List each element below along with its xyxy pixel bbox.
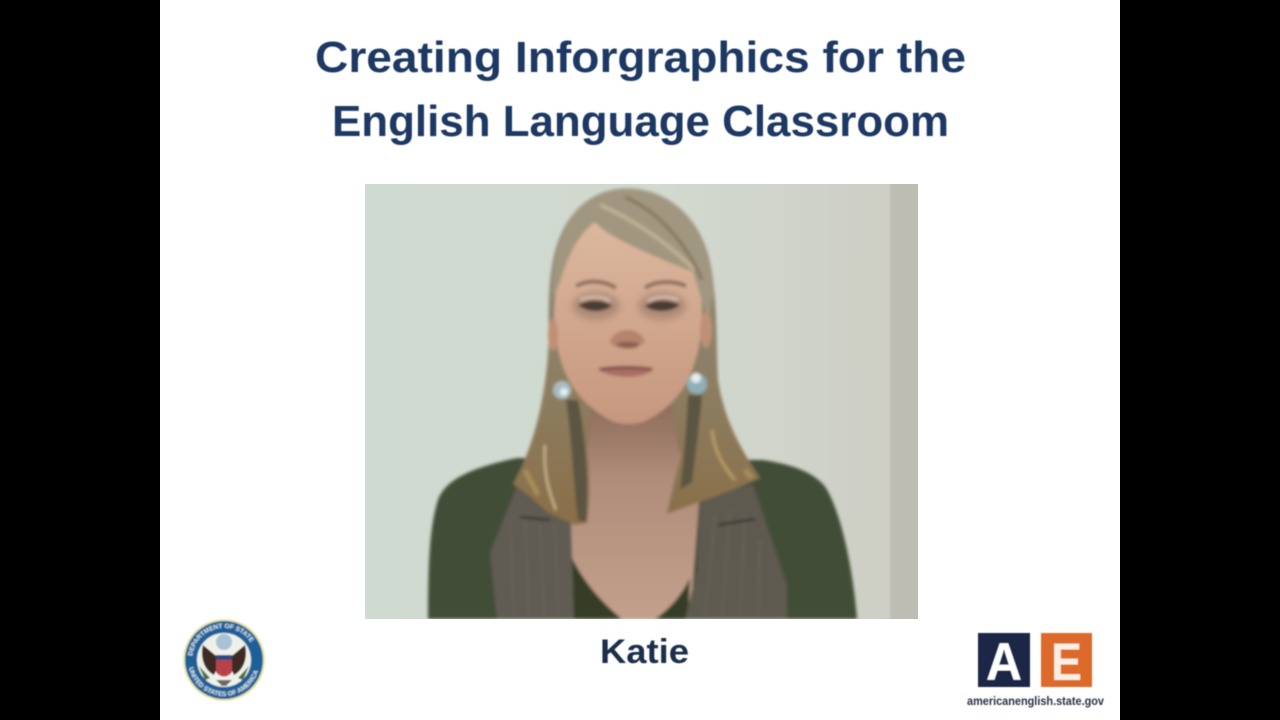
vest left <box>490 486 574 619</box>
mouth <box>597 366 654 377</box>
slide background <box>160 0 1120 720</box>
hair locks <box>513 330 589 525</box>
american english logo <box>967 633 1104 708</box>
eye sockets and eyes <box>572 292 620 320</box>
nose <box>610 330 645 348</box>
vest stripes <box>510 510 760 615</box>
logo tile A: A <box>986 633 1022 692</box>
ears <box>548 319 558 351</box>
vest right <box>685 485 787 619</box>
seal lettering <box>192 628 256 660</box>
hair back <box>546 186 719 456</box>
title <box>315 33 966 146</box>
fringe <box>552 190 714 320</box>
title: Creating Inforgraphics for the <box>315 33 966 82</box>
department of state seal: UNITED STATES OF AMERICA <box>188 666 260 698</box>
eagle <box>216 634 232 650</box>
department of state seal: DEPARTMENT OF STATE <box>186 622 256 657</box>
neck and chest <box>568 405 700 619</box>
green shirt <box>428 458 857 619</box>
inner top <box>571 556 690 619</box>
speaker name: Katie <box>600 633 689 671</box>
logo tile E: E <box>1051 633 1082 692</box>
logo url: americanenglish.state.gov <box>967 694 1104 708</box>
speaker photo <box>365 180 922 625</box>
department of state seal <box>182 618 266 702</box>
face <box>554 221 702 424</box>
title: English Language Classroom <box>332 97 949 146</box>
earrings <box>553 381 571 399</box>
